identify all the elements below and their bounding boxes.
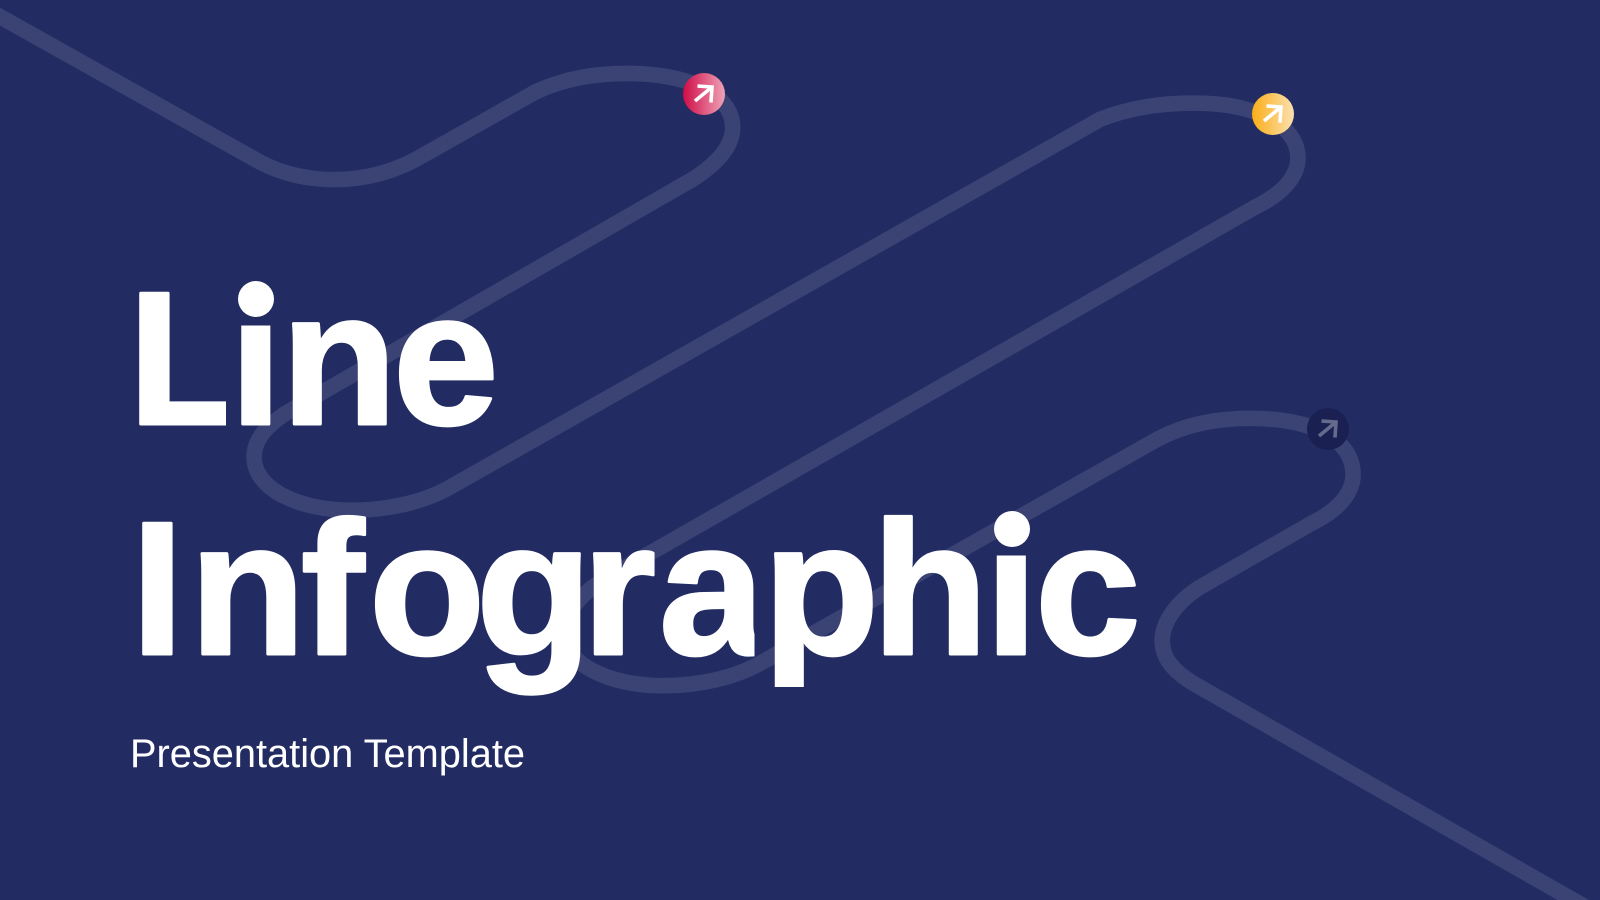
icon: dark arrow marker [1307,408,1349,450]
title line 1: Line [128,253,499,465]
round dot on i of Infographic [994,511,1030,547]
round dot on i of Line [238,281,274,317]
title line 2: Infographic [131,483,1141,695]
subtitle: Presentation Template [130,732,525,776]
title [128,253,1141,695]
icon: red arrow marker [683,73,725,115]
icon: yellow arrow marker [1252,93,1294,135]
